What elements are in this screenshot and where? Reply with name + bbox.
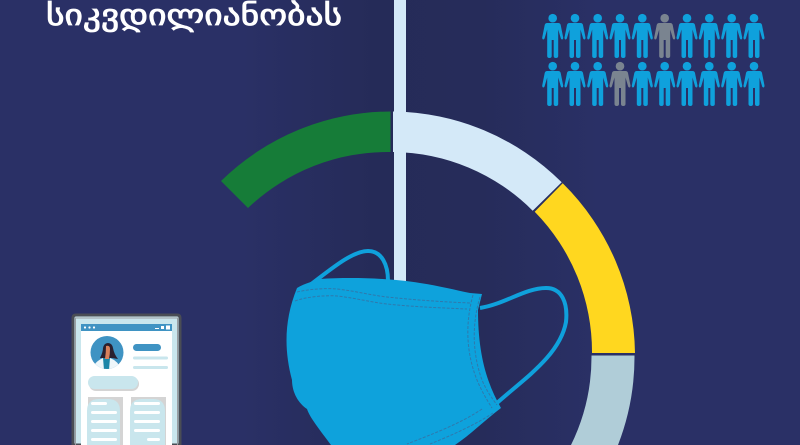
tablet frame — [73, 315, 180, 445]
people pictogram — [542, 14, 764, 106]
right ear loop — [480, 288, 566, 403]
gauge segment: light blue — [393, 112, 562, 211]
face mask — [287, 251, 566, 445]
gauge chart — [221, 112, 635, 445]
vertical bar — [394, 0, 406, 290]
grey people — [610, 14, 675, 106]
right card — [130, 397, 166, 445]
mask stitching — [295, 289, 497, 444]
left ear loop — [310, 251, 388, 285]
blue people — [542, 14, 764, 106]
gauge segment: green — [221, 112, 390, 208]
tablet with doctor profile — [73, 315, 180, 445]
pill button — [89, 377, 139, 391]
doctor avatar — [90, 336, 124, 370]
left card — [87, 397, 123, 445]
gauge segment: yellow — [535, 183, 635, 353]
gauge segment: grey blue — [571, 356, 635, 445]
screen — [81, 324, 172, 445]
mask body — [287, 278, 501, 445]
window bar — [81, 324, 172, 331]
name and detail bars — [133, 344, 161, 351]
